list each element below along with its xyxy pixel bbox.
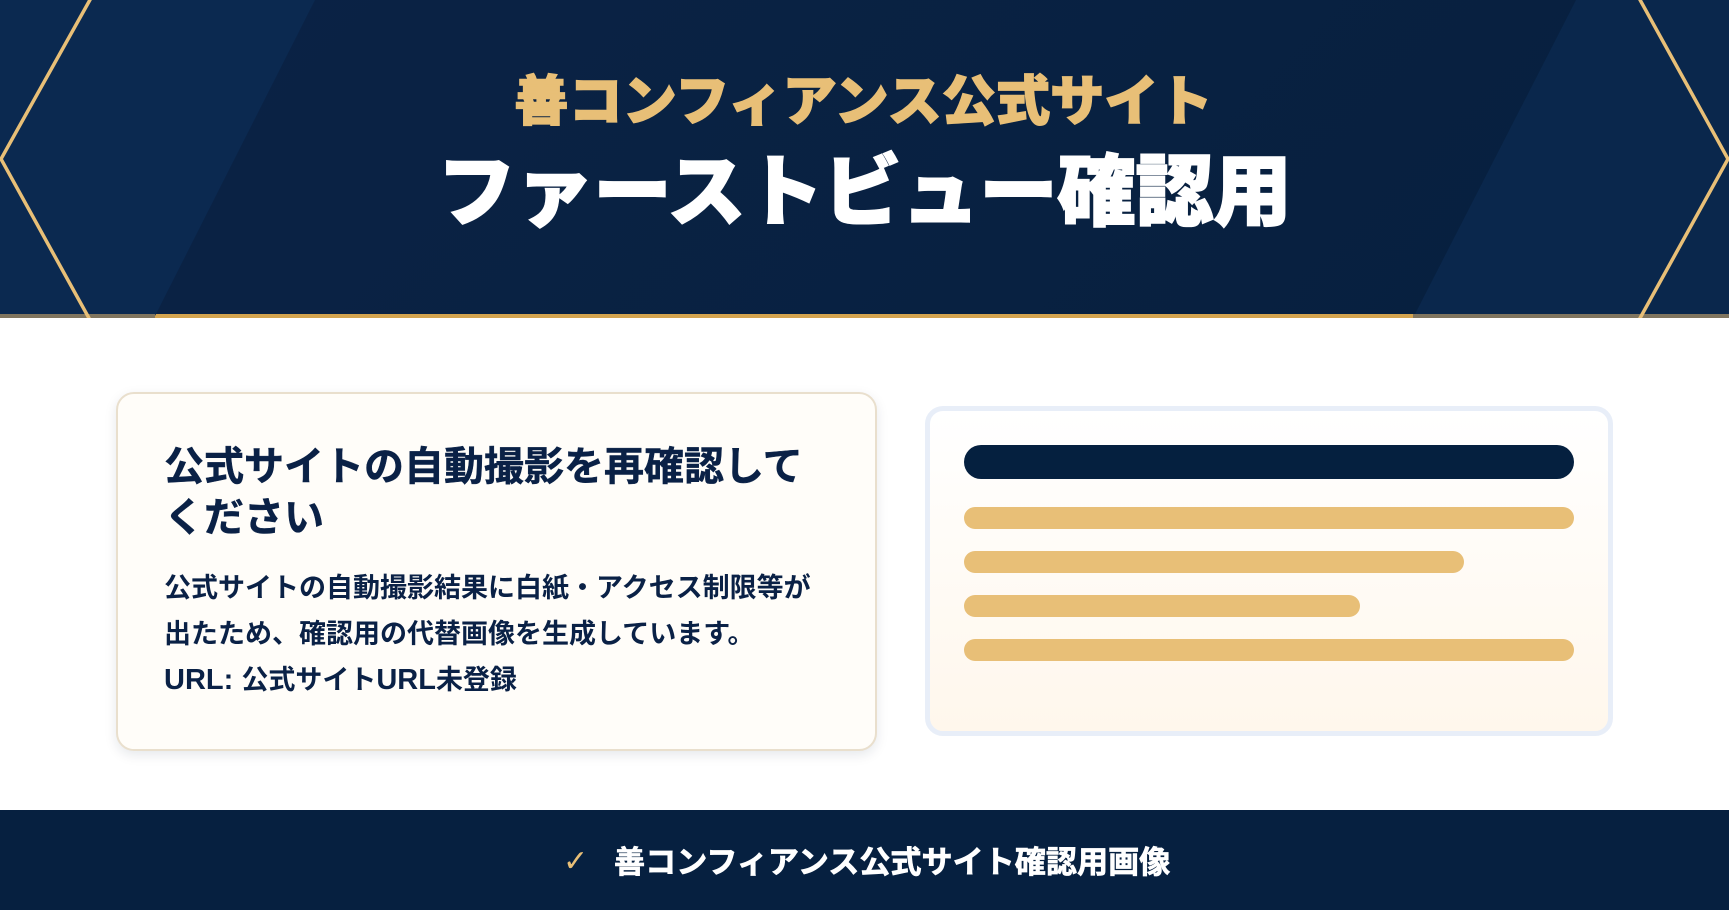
card heading: ください	[164, 496, 324, 540]
header banner	[0, 0, 1729, 318]
card body text	[164, 573, 811, 696]
header background with gold rule and angled panels	[0, 0, 1729, 318]
panel: notice card	[116, 392, 877, 751]
card body text: URL: 公式サイトURL未登録	[164, 664, 517, 696]
card body text: 出たため、確認用の代替画像を生成しています。	[164, 619, 754, 649]
card heading	[164, 445, 803, 540]
footer bar	[0, 810, 1729, 910]
preview line 1	[964, 507, 1574, 529]
icon: check mark: ✓	[563, 844, 588, 879]
panel: placeholder preview	[925, 406, 1613, 736]
title: purpose: ファーストビュー確認用	[437, 148, 1292, 236]
card body text: 公式サイトの自動撮影結果に白紙・アクセス制限等が	[164, 573, 811, 603]
title: site name: 善コンフィアンス公式サイト	[514, 72, 1213, 132]
preview line 3	[964, 595, 1360, 617]
preview line 2	[964, 551, 1464, 573]
preview line 4	[964, 639, 1574, 661]
card heading: 公式サイトの自動撮影を再確認して	[164, 445, 803, 489]
preview title bar	[964, 445, 1574, 479]
footer text: 善コンフィアンス公式サイト確認用画像	[614, 845, 1170, 880]
